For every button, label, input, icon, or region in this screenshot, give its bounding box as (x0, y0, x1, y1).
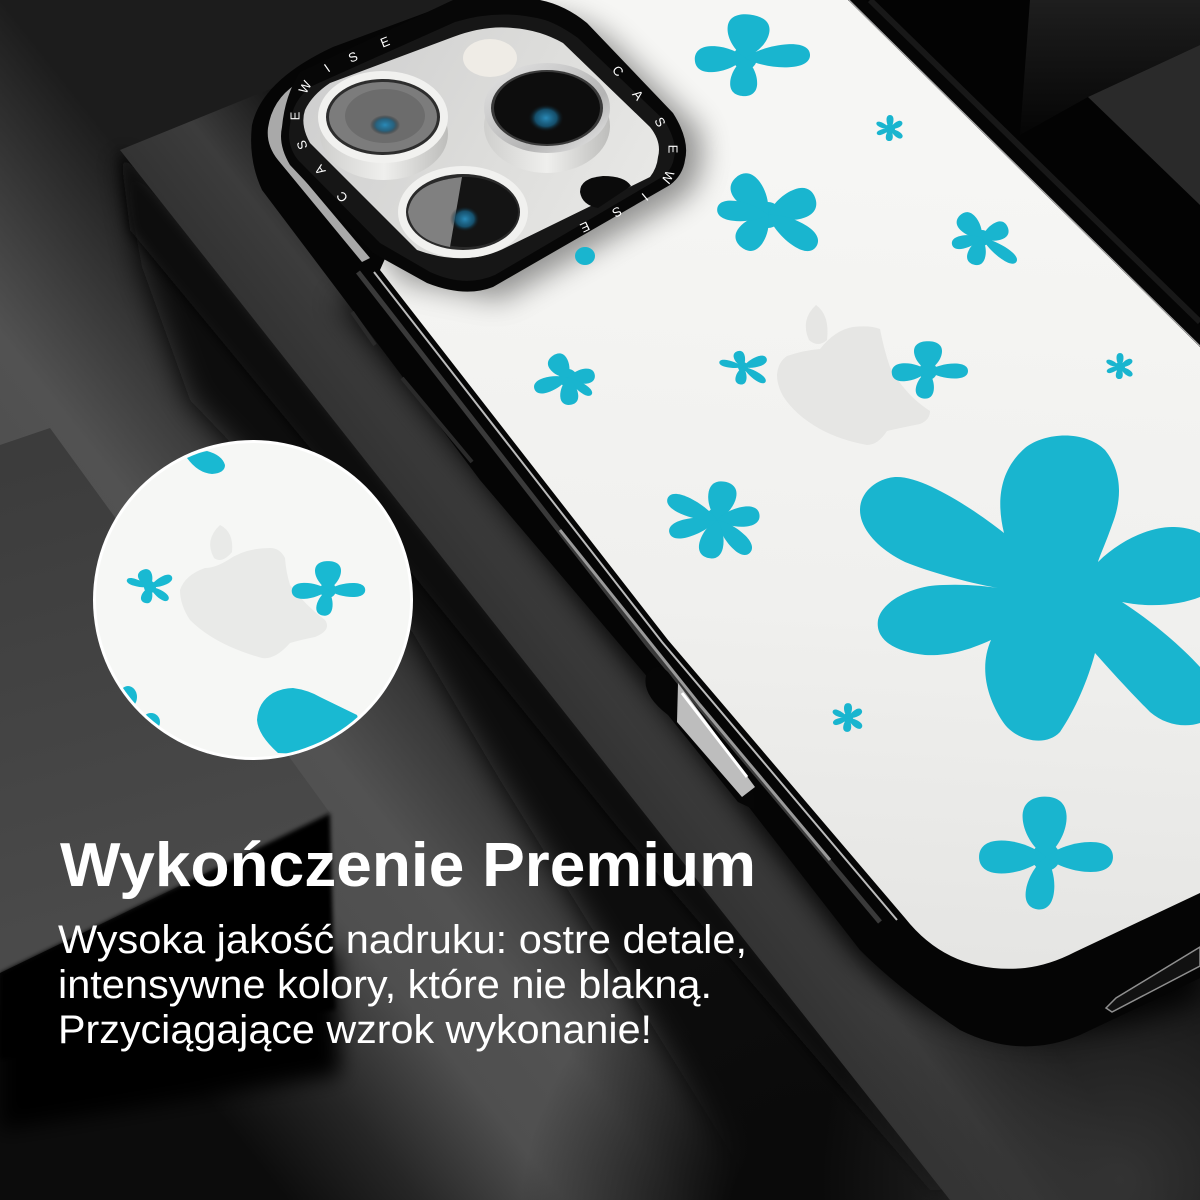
side button volume (402, 378, 472, 462)
flower tiny remnants (123, 686, 137, 704)
left block front soft (0, 950, 340, 1130)
brand text on ring: S (346, 48, 360, 66)
charging port (1106, 947, 1200, 1012)
camera shadow on back (300, 13, 702, 300)
flower hidden (575, 247, 595, 265)
brand text on ring (288, 33, 680, 236)
floor soft shadow (548, 1032, 934, 1200)
description text: Przyciągające wzrok wykonanie! (58, 1008, 652, 1052)
flower butterfly close-up (291, 561, 365, 617)
description text (58, 918, 747, 1052)
top right block (1088, 45, 1200, 205)
flower star (875, 115, 904, 141)
case body (251, 0, 1200, 1046)
top right panel (1022, 0, 1200, 102)
description text: Wysoka jakość nadruku: ostre detale, (58, 918, 747, 962)
brand text on ring: E (288, 111, 302, 120)
camera surround (281, 0, 686, 292)
flower star right (1105, 353, 1134, 379)
camera glass (303, 27, 659, 258)
brand text on ring: S (651, 114, 669, 130)
lens three (398, 166, 528, 258)
flower left (534, 353, 595, 405)
lower right glow (880, 990, 1200, 1200)
big petal close-up (257, 688, 358, 754)
brand text on ring: W (295, 77, 315, 96)
brand text on ring: A (311, 162, 329, 178)
plinth side shadow (122, 198, 801, 1124)
phone shadow (335, 300, 1200, 1033)
flower star bottom (832, 703, 864, 732)
apple logo close-up (180, 525, 327, 658)
side glass strip by camera (268, 84, 370, 262)
flash (463, 39, 517, 77)
left block top (0, 428, 330, 973)
brand text on ring: W (658, 168, 677, 186)
title: Wykończenie Premium (60, 831, 756, 900)
flower top remnant (187, 451, 225, 474)
plinth side crisp (120, 159, 744, 948)
brand text on ring: E (378, 33, 392, 51)
flower small (719, 349, 768, 385)
lens one (318, 71, 448, 180)
brand text on ring: I (321, 61, 333, 75)
left block front (0, 812, 336, 1010)
top right dark (860, 0, 1200, 340)
rim lines (374, 272, 897, 920)
flower right (952, 212, 1017, 266)
brand text on ring: A (629, 87, 647, 103)
brand text on ring: C (333, 189, 351, 205)
flower top (694, 12, 811, 97)
zoom detail circle (93, 440, 413, 760)
printed pattern (300, 12, 1200, 912)
flower five petal (717, 173, 818, 252)
lidar sensor (580, 176, 631, 208)
apple logo on back (777, 305, 930, 445)
side button silver (645, 667, 755, 810)
description text: intensywne kolory, które nie blakną. (58, 963, 712, 1007)
brand text on ring: S (293, 138, 311, 152)
big flower (860, 436, 1200, 741)
brand text on ring: E (578, 218, 592, 236)
brand text on ring: I (639, 190, 651, 204)
back panel (380, 0, 1200, 969)
flower bottom (979, 796, 1113, 912)
brand text on ring: C (609, 63, 627, 79)
brand text on ring: E (666, 145, 680, 154)
flower star close-up (126, 569, 172, 604)
brand text on ring: S (609, 203, 624, 221)
flower mid left (664, 479, 761, 561)
phone case (251, 0, 1200, 1046)
side button top (352, 312, 375, 345)
lens two (484, 63, 610, 173)
flower four petal (891, 341, 968, 400)
